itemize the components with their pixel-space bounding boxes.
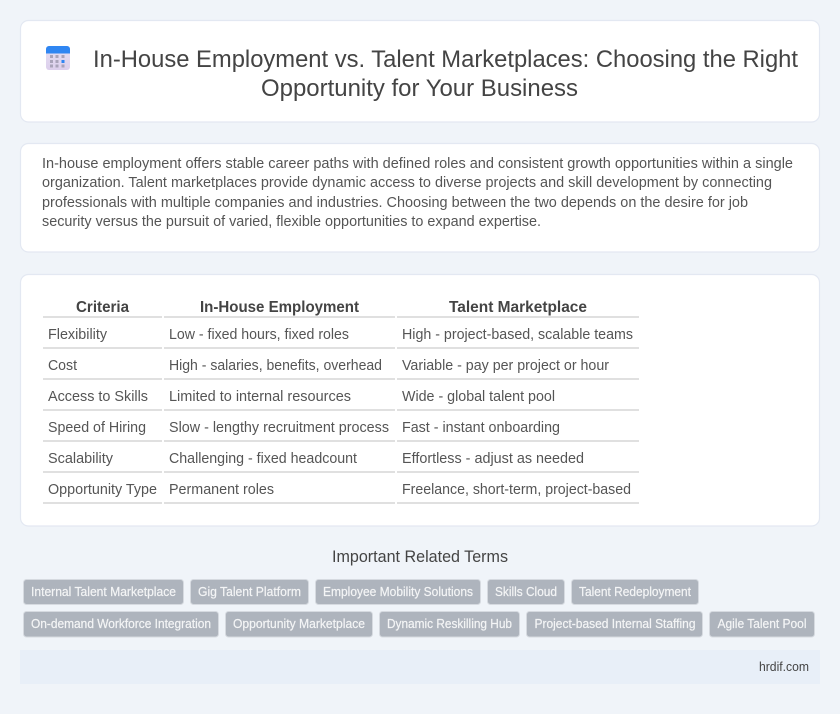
footer bar: hrdif.com [759,659,809,674]
tag: Dynamic Reskilling Hub [380,612,520,637]
tag: Agile Talent Pool [710,612,814,637]
tag: Talent Redeployment: Talent Redeployment [579,585,691,599]
table row: Flexibility: Low - fixed hours, fixed roles [169,327,349,343]
table row: Cost: High - salaries, benefits, overhead [169,358,382,374]
tag: On-demand Workforce Integration [24,612,218,637]
tag: Opportunity Marketplace: Opportunity Marketplace [233,617,365,631]
table row: Flexibility: Flexibility [48,327,108,343]
text block: introduction: In-house employment offers stable career paths with defined roles and consistent growth opportunities within a single [42,156,793,172]
icon: calendar [46,46,70,70]
tag: Skills Cloud: Skills Cloud [495,585,557,599]
table row: Scalability: Effortless - adjust as needed [402,451,584,467]
table row: Speed of Hiring: Speed of Hiring [48,420,146,436]
tag: Dynamic Reskilling Hub: Dynamic Reskilling Hub [387,617,512,631]
text block: introduction: security versus the pursuit of varied, flexible opportunities to expand expertise. [42,214,541,230]
text block: introduction: organization. Talent marketplaces provide dynamic access to diverse projects and skill development by connecting [42,175,772,191]
tag: Employee Mobility Solutions [316,580,480,604]
footer bar [20,650,820,684]
table row: Speed of Hiring: Fast - instant onboarding [402,420,560,436]
tag list: related terms [24,580,814,637]
table row: Scalability: Scalability [48,451,114,467]
tag: Internal Talent Marketplace [24,580,184,604]
title [93,46,798,102]
tag: Talent Redeployment [572,580,698,604]
table row: Cost [43,358,639,380]
tag: Agile Talent Pool: Agile Talent Pool [718,617,806,631]
table row: Scalability: Challenging - fixed headcount [169,451,357,467]
table row: Speed of Hiring [43,420,639,442]
tag: Opportunity Marketplace [226,612,372,637]
table row: Speed of Hiring: Slow - lengthy recruitment process [169,420,389,436]
table row: Access to Skills: Limited to internal resources [169,389,351,405]
table row: Scalability [43,451,639,473]
table row: Opportunity Type [43,482,639,504]
tag: Project-based Internal Staffing: Project-based Internal Staffing [534,617,696,631]
table row: Opportunity Type: Opportunity Type [48,482,157,498]
tag: Internal Talent Marketplace: Internal Talent Marketplace [31,585,176,599]
panel: title header [20,20,820,122]
tag: Project-based Internal Staffing [526,612,702,637]
table row: Access to Skills: Wide - global talent pool [402,389,555,405]
title: In-House Employment vs. Talent Marketplaces: Choosing the Right [93,46,798,73]
table row: Access to Skills [43,389,639,411]
tag: Gig Talent Platform: Gig Talent Platform [198,585,301,599]
table header row: In-House Employment [200,299,360,316]
table header row: Talent Marketplace [449,299,587,316]
table header row: Criteria [76,299,129,316]
table row: Flexibility [43,327,639,349]
tag: Gig Talent Platform [190,580,308,604]
heading: related terms: Important Related Terms [332,548,508,566]
text block: introduction [42,156,793,230]
table row: Flexibility: High - project-based, scalable teams [402,327,633,343]
tag: Employee Mobility Solutions: Employee Mobility Solutions [323,585,473,599]
table row: Opportunity Type: Permanent roles [169,482,274,498]
panel: comparison table [20,274,820,526]
table row: Opportunity Type: Freelance, short-term, project-based [402,482,631,498]
tag: Skills Cloud [488,580,564,604]
table row: Cost: Variable - pay per project or hour [402,358,609,374]
table row: Access to Skills: Access to Skills [48,389,148,405]
tag: On-demand Workforce Integration: On-demand Workforce Integration [31,617,211,631]
title: Opportunity for Your Business [261,75,578,102]
table row: Cost: Cost [48,358,77,374]
panel: introduction paragraph [20,144,820,252]
table header row [43,299,639,318]
text block: introduction: professionals with multiple companies and industries. Choosing between the two depends on the desire for job [42,195,748,211]
